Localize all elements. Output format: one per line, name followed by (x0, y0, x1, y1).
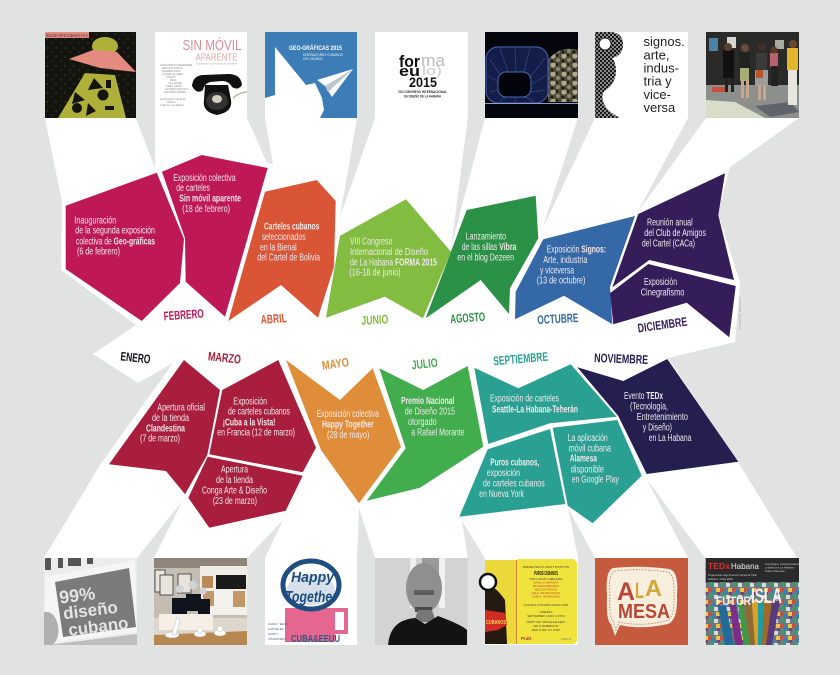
photo: Signos poster (595, 32, 688, 118)
panel: marzo 3: Apertura (221, 465, 248, 476)
photo: Puros cubanos invitation: PUROS CUBANOS (534, 571, 558, 577)
photo: Sin móvil aparente poster: VILLAFAÑE (168, 80, 182, 85)
month labels: SEPTIEMBRE (493, 350, 549, 368)
panel: diciembre 1 (612, 173, 734, 287)
photo: Alamesa app logo (595, 558, 688, 645)
photo: Sin móvil aparente poster: LAZARO LLANES (162, 72, 183, 76)
photo: Alamesa app logo: A (645, 575, 662, 601)
photo: Signos poster: versa (644, 100, 676, 115)
panel: marzo 2: de carteles cubanos (228, 407, 290, 418)
photo: Sin móvil aparente poster: ARIEL CRUZ (166, 84, 182, 88)
photo: Forma 2015 logo (375, 32, 468, 118)
panel: diciembre 1: del Club de Amigos (644, 228, 706, 239)
photo: TEDx Habana Futurisla poster: Tecnología, entretenimiento (765, 562, 800, 566)
panel: marzo 3: (23 de marzo) (213, 496, 257, 507)
panel: marzo 1: Clandestina (146, 423, 185, 434)
panel: abril: seleccionados (262, 232, 306, 243)
photo: TEDx Habana Futurisla poster: TEDx (708, 561, 730, 571)
panel: julio (367, 366, 483, 501)
panel: noviembre: Evento TEDx (624, 391, 663, 402)
photo: Sin móvil aparente poster: NELSON PONCE (162, 66, 183, 70)
panel: abril (228, 180, 336, 321)
photo: Sin móvil aparente poster: RAUL (170, 78, 177, 82)
panel: noviembre: en La Habana (649, 433, 692, 444)
photo: Forma 2015 logo: for (399, 52, 420, 71)
panel: diciembre 2 (610, 264, 736, 337)
panel: agosto: de las sillas Vibra (462, 242, 517, 253)
photo: Sin móvil aparente poster: Galería (167, 100, 176, 104)
photo: TEDx Habana Futurisla poster: y diseño en La Habana (765, 566, 794, 570)
photo: Puros cubanos invitation: CUBANOS (486, 620, 507, 626)
month labels: AGOSTO (450, 310, 486, 326)
photo: Vibra chair (485, 32, 578, 118)
photo: Puros cubanos invitation: PRATT ART SPACE GALLERY (527, 620, 565, 624)
panel: febrero 1: (6 de febrero) (77, 246, 120, 257)
panel: marzo 1: Apertura oficial (157, 403, 205, 414)
panel: marzo 3 (188, 457, 303, 528)
photo: Sin móvil aparente poster (155, 32, 247, 118)
photo: Signos poster: vice- (644, 87, 671, 102)
photo: Sin móvil aparente poster: EDUARDO MARÍN (164, 90, 186, 94)
photo: Sin móvil aparente poster: JOSÉ PEPITO MENÉNDEZ (160, 62, 193, 67)
panel: agosto: en el blog Dezeen (457, 253, 514, 264)
panel: noviembre: y Diseño) (643, 422, 672, 433)
panel: septiembre 3: La aplicación (568, 433, 608, 444)
photo: Geo-gráficas 2015 poster (265, 32, 357, 118)
photo: Sin móvil aparente poster: 18 de febrero de 2015 (160, 97, 186, 101)
photo: Happy Together poster: Happy (291, 569, 335, 586)
photo: 99% diseño cubano sign: diseño (62, 598, 119, 623)
panel: septiembre 1: Seattle-La Habana-Teherán (492, 404, 578, 415)
panel: febrero 2 (162, 155, 268, 317)
panel: noviembre (577, 359, 738, 474)
month labels: ENERO (120, 349, 151, 367)
photo: Conga store interior (154, 558, 247, 645)
photo: Puros cubanos invitation: 118 CHAMBERS ST (533, 624, 559, 628)
panel: diciembre 2: Cinegrafismo (641, 287, 685, 298)
panel: noviembre: (Tecnología, (630, 402, 668, 413)
panel: marzo 1: (7 de marzo) (140, 434, 180, 445)
photo: Sin móvil aparente poster: SIN MÓVIL (182, 37, 242, 54)
panel: febrero 1: de la segunda exposición (75, 226, 155, 237)
month labels: JUNIO (361, 312, 389, 328)
white connector shape linking photos and timeline (44, 118, 799, 558)
panel: febrero 2: (18 de febrero) (182, 204, 230, 215)
month labels: JULIO (411, 356, 438, 372)
panel: septiembre 3: móvil cubana (569, 443, 611, 454)
photo: TEDx Habana Futurisla poster: Organizado bajo licencia oficial de TED (708, 573, 757, 577)
panel: mayo (286, 360, 401, 503)
photo: Forma 2015 logo: 2015 (409, 74, 437, 90)
month labels: MAYO (321, 355, 350, 373)
photo: Happy Together poster: TOGETHER (268, 637, 285, 641)
photo: Geo-gráficas 2015 poster: GEO-GRÁFICAS 2015 (289, 43, 342, 52)
panel: julio: otorgado (408, 417, 437, 428)
panel: septiembre 3: disponible (571, 464, 604, 475)
panel: febrero 1: colectiva de Geo-gráficas (76, 236, 155, 247)
panel: junio (326, 199, 451, 318)
panel: febrero 1 (66, 173, 184, 321)
photo: Geo-gráficas UFO poster: RICA DE ARTE CUBANO | F.A.C (46, 33, 88, 38)
photo: Signos poster: arte, (644, 47, 670, 62)
photo: Happy Together poster: HAPPY (268, 632, 278, 636)
photo: Puros cubanos invitation: POR LUNAR CHIBILIDAD (530, 577, 562, 581)
photo: Sin móvil aparente poster: exposición colectiva de carteles (196, 62, 238, 66)
photo: Rafael Morante portrait (375, 558, 468, 645)
photo: Sin móvil aparente poster: Calle 23, La Habana (160, 103, 184, 107)
photo: Puros cubanos invitation: SEPTEMBER 1 2015, 6-8 PM (527, 614, 565, 618)
month labels: MARZO (207, 349, 242, 367)
panel: marzo 1: de la tienda (152, 413, 189, 424)
photo: Sin móvil aparente poster: APARENTE (196, 52, 238, 64)
panel: febrero 1: Inauguración (74, 216, 116, 226)
photo: Geo-gráficas 2015 poster: DEL MUNDO (303, 57, 323, 61)
panel: marzo 3: de la tienda (216, 475, 253, 486)
panel: diciembre 1: del Cartel (CACa) (642, 239, 695, 250)
photo: Happy Together poster: CUBA&EEUU (291, 634, 340, 645)
photo: Geo-gráficas UFO poster (45, 32, 136, 118)
panel: julio: de Diseño 2015 (405, 406, 455, 417)
panel: mayo: Happy Together (322, 419, 374, 430)
panel: mayo: Exposición colectiva (317, 409, 379, 420)
photo: Forma 2015 logo: lo) (422, 63, 442, 78)
panel: septiembre 2: exposición (487, 468, 520, 479)
photo: Forma 2015 logo: DE DISEÑO DE LA HABANA (404, 94, 442, 98)
photo: Happy Together poster: Together (285, 589, 338, 606)
panel: septiembre 2: en Nueva York (479, 489, 525, 500)
photo: Puros cubanos invitation: OPENING (540, 610, 552, 614)
photo: Puros cubanos invitation: FRONT (561, 637, 571, 641)
photo: Geo-gráficas 2015 poster: DISEÑADORES CUBANOS (303, 52, 344, 57)
photo: Forma 2015 logo: ma (421, 51, 446, 70)
photo: Puros cubanos invitation: NEW YORK, NY 10007 (531, 628, 561, 632)
photo: Signos poster: indus- (644, 60, 679, 75)
panel: julio: Premio Nacional (401, 396, 454, 407)
panel: octubre: (13 de octubre) (537, 276, 585, 287)
panel: marzo 2: en Francia (12 de marzo) (217, 428, 295, 439)
panel: agosto: Lanzamiento (466, 231, 506, 242)
panel: junio: (16-18 de junio) (349, 268, 401, 279)
month labels: ABRIL (260, 311, 287, 327)
photo: Sin móvil aparente poster: FOCHO (166, 75, 175, 79)
panel: marzo 2: ¡Cuba a la Vista! (223, 417, 275, 428)
photo: Puros cubanos invitation: CUTURAL POSTERS FROM CUBA (524, 603, 569, 607)
month labels: FEBRERO (163, 307, 204, 323)
panel: noviembre: Entretenimiento (637, 412, 688, 423)
photo: TEDx Habana Futurisla poster: Habana, Cuba 2015 (708, 577, 733, 581)
panel: marzo 2 (209, 360, 316, 472)
photo: Puros cubanos invitation: RAUL VALDES PAUTA (532, 591, 560, 595)
panel: julio: a Rafael Morante (411, 427, 465, 438)
panel: diciembre 2: Exposición (644, 277, 677, 288)
designer credit: DENISE MAURY (738, 297, 742, 329)
panel: febrero 2: Exposición colectiva (173, 173, 236, 184)
photo: TEDx Habana Futurisla poster (706, 558, 800, 645)
month labels: OCTUBRE (537, 311, 579, 327)
panel: octubre: y viceversa (540, 265, 574, 276)
photo: Happy Together poster: CARTELES (268, 627, 284, 631)
panel: abril: Carteles cubanos (264, 221, 320, 232)
panel: junio: VIII Congreso (350, 236, 393, 247)
photo: TEDx Habana Futurisla poster: Habana (731, 561, 759, 571)
panel: septiembre 3: Alamesa (570, 454, 597, 465)
photo: Forma 2015 logo: VIII CONGRESO INTERNACIONAL (398, 90, 447, 94)
photo: Signos poster: signos. (644, 34, 685, 49)
photo: TEDx Habana Futurisla poster: ISLA (751, 585, 782, 608)
panel: febrero 2: de carteles (176, 183, 210, 194)
panel: agosto (426, 196, 538, 318)
photo: 99% diseño cubano sign: cubano (67, 613, 129, 640)
panel: septiembre 3 (553, 420, 642, 523)
photo: Puros cubanos invitation: MICHELE MIRANDA (533, 584, 559, 588)
photo: Happy Together poster (265, 558, 357, 645)
photo: Happy Together poster: CUBA Y EEUU (268, 622, 288, 626)
panel: diciembre 1: Reunión anual (647, 218, 693, 229)
panel: abril: del Cartel de Bolivia (257, 253, 320, 264)
panel: febrero 2: Sin móvil aparente (179, 194, 241, 205)
photo: Sin móvil aparente poster: CLAUDIO SOTOLO (165, 87, 188, 91)
photo: Puros cubanos invitation: DANILLA SIMANCA (533, 580, 559, 584)
panel: octubre: Exposición Signos: (547, 244, 606, 255)
photo: Forma 2015 logo: eu (399, 63, 420, 80)
panel: septiembre 2: Puros cubanos, (490, 458, 539, 469)
photo: Alamesa app logo: L (635, 578, 644, 603)
photo: TEDx Habana Futurisla poster: FUTUR (716, 594, 751, 608)
photo: Alamesa app logo: A (617, 578, 635, 606)
photo: Puros cubanos invitation: NELSON PONCE (535, 588, 557, 592)
panel: octubre (515, 216, 635, 324)
photo: Alamesa app logo: MESA (618, 601, 670, 623)
photo: Signos poster: tria y (644, 74, 672, 89)
month labels: NOVIEMBRE (594, 351, 648, 367)
panel: junio: de La Habana FORMA 2015 (350, 258, 437, 269)
panel: marzo 3: Conga Arte & Diseño (202, 486, 267, 497)
month labels: DICIEMBRE (637, 315, 688, 335)
photo: 99% diseño cubano sign (44, 558, 137, 645)
photo: Puros cubanos invitation (480, 558, 578, 645)
photo: Puros cubanos invitation: Pratt (521, 636, 532, 641)
photo: TEDx Habana Futurisla poster: Teatro Nacional (765, 569, 785, 573)
panel: septiembre 2: de carteles cubanos (483, 479, 545, 490)
photo: Puros cubanos invitation: JOSE L. RODRIGUEZ (532, 594, 560, 598)
photo: Puros cubanos invitation: PRESENTED BY PRATT INSTITUTE (523, 565, 569, 569)
photo: 99% diseño cubano sign: 99% (58, 583, 96, 608)
photo: exhibition visitors (706, 32, 799, 118)
panel: septiembre 3: en Google Play (572, 475, 619, 486)
panel: junio: Internacional de Diseño (350, 247, 428, 258)
panel: mayo: (28 de mayo) (327, 430, 369, 441)
panel: septiembre 1: Exposición de carteles (490, 394, 559, 405)
panel: marzo 2: Exposición (233, 396, 267, 407)
panel: abril: en la Bienal (260, 242, 297, 253)
month labels (120, 307, 688, 373)
panel: octubre: Arte, industria (543, 255, 588, 266)
photo: Sin móvil aparente poster: ROMMEL RIOS (162, 69, 181, 73)
panel: septiembre 2 (459, 429, 565, 517)
panel: marzo 1 (109, 360, 220, 494)
panel: septiembre 1 (474, 364, 617, 444)
